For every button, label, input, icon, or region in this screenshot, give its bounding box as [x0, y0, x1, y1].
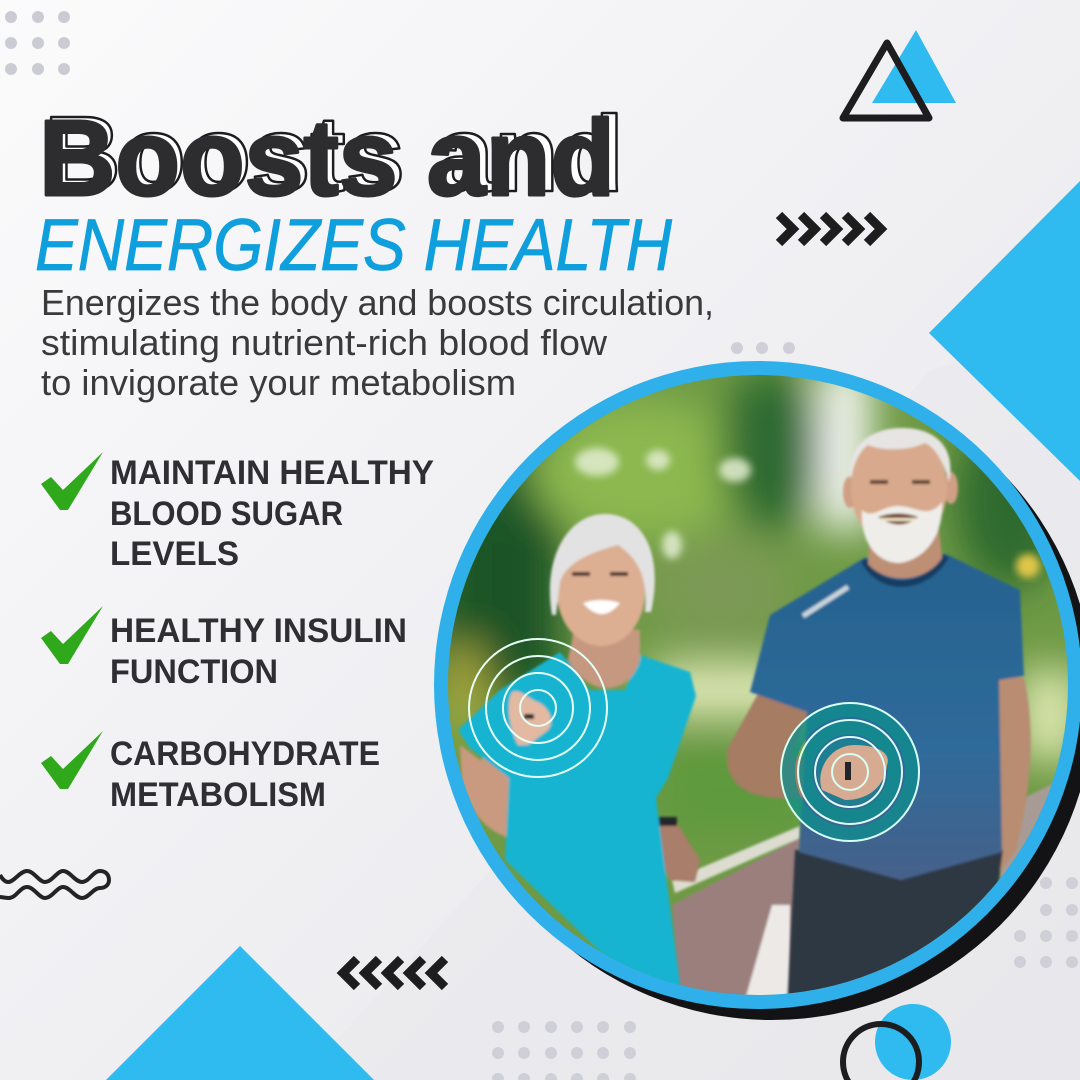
benefit 2: HEALTHY INSULIN	[110, 612, 407, 650]
benefit 1	[110, 454, 434, 573]
description text: stimulating nutrient-rich blood flow	[41, 322, 608, 363]
dot grid: right of photo	[1014, 877, 1078, 968]
benefit 1: LEVELS	[110, 535, 239, 573]
woman smile	[583, 600, 620, 614]
dot grid: top left	[5, 11, 70, 75]
benefit 1: MAINTAIN HEALTHY	[110, 454, 434, 492]
benefit 2	[110, 612, 407, 691]
description text	[41, 282, 714, 403]
man right arm	[997, 675, 1032, 872]
heading: ENERGIZES HEALTH: ENERGIZES HEALTH	[35, 205, 672, 286]
title: Boosts and: Boosts and	[44, 93, 624, 214]
woman neck	[568, 625, 640, 688]
benefit 1: BLOOD SUGAR	[110, 495, 343, 533]
man neck and head	[868, 520, 942, 578]
woman face	[557, 538, 645, 646]
woman lower hand	[655, 820, 700, 882]
man left arm	[726, 693, 809, 800]
photo: couple jogging	[430, 360, 1080, 1010]
black offset circle behind photo	[450, 376, 1080, 1020]
woman t-shirt	[458, 652, 696, 990]
benefit 3	[110, 735, 380, 814]
large blue diamond: right edge	[929, 181, 1080, 481]
triangle icon: top right	[843, 30, 956, 118]
description text: Energizes the body and boosts circulation,	[41, 282, 714, 323]
blue ring around photo	[434, 361, 1080, 1009]
bottom blue triangle	[106, 946, 374, 1080]
wave outline	[0, 871, 109, 898]
man	[727, 428, 1031, 1010]
chevrons: top right	[779, 215, 881, 243]
man shorts	[787, 850, 1003, 1010]
signal rings: man	[781, 703, 919, 841]
title: Boosts and: Boosts and	[39, 97, 615, 218]
man t-shirt	[750, 554, 1024, 880]
dot grid: bottom center	[492, 1021, 636, 1080]
woman	[458, 514, 700, 990]
road	[670, 782, 1052, 995]
benefit 3: METABOLISM	[110, 776, 326, 814]
signal rings: woman	[469, 639, 607, 777]
photo background foliage	[430, 360, 1080, 1010]
woman fist	[509, 691, 551, 745]
woman arm	[458, 744, 512, 839]
benefit 3: CARBOHYDRATE	[110, 735, 380, 773]
description text: to invigorate your metabolism	[41, 362, 516, 403]
woman hair	[550, 514, 655, 615]
check icon 1	[41, 452, 103, 510]
check icon 2	[41, 606, 103, 664]
bottom circles	[843, 1004, 951, 1080]
dot grid: above photo	[731, 342, 795, 354]
benefit 2: FUNCTION	[110, 653, 278, 691]
chevrons: bottom	[343, 959, 445, 987]
check icon 3	[41, 731, 103, 789]
